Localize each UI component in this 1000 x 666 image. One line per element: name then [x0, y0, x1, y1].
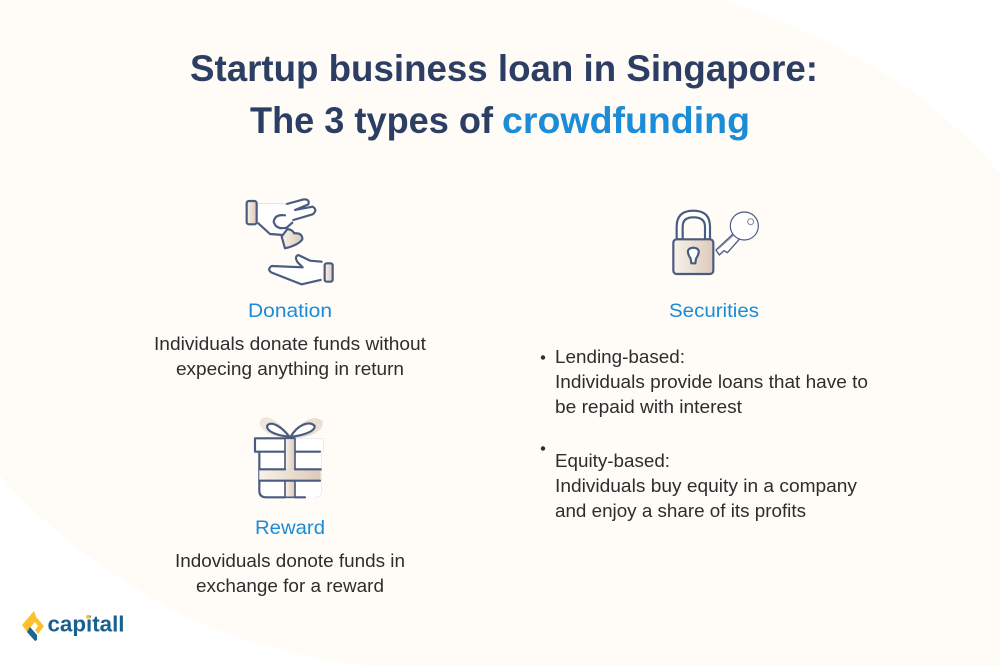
bullet: lending-based: be repaid with interest [555, 396, 742, 417]
icon: padlock and key [673, 211, 758, 274]
title: The 3 types of [250, 100, 494, 141]
icon: giving hands [247, 199, 333, 284]
panel: reward [175, 417, 405, 596]
title: Startup business loan in Singapore: [190, 48, 818, 89]
bullet: equity-based: and enjoy a share of its profits [555, 500, 806, 521]
panel: securities [541, 211, 868, 521]
panel: donation [154, 199, 426, 379]
bullet: equity-based: Equity-based: [555, 450, 670, 471]
icon: gift box [255, 417, 323, 497]
text: donation description: Individuals donate funds without [154, 333, 426, 354]
title: crowdfunding [502, 100, 750, 141]
bullet: lending-based: Individuals provide loans that have to [555, 371, 868, 392]
text: donation description: expecing anything in return [176, 358, 404, 379]
heading: reward: Reward [255, 517, 325, 539]
heading: donation: Donation [248, 300, 332, 322]
logo: capitall [22, 611, 124, 641]
icon: logo mark [22, 611, 44, 641]
text: reward description: Indoviduals donote funds in [175, 550, 405, 571]
bullet: equity-based: Individuals buy equity in a company [555, 475, 858, 496]
wordmark: capitall [48, 612, 124, 636]
text: donation description [154, 333, 426, 379]
bullet: lending-based [541, 346, 868, 417]
bullet: equity-based [541, 446, 858, 521]
text: reward description [175, 550, 405, 596]
bullet: lending-based: Lending-based: [555, 346, 685, 367]
heading: securities: Securities [669, 300, 759, 322]
text: reward description: exchange for a reward [196, 575, 384, 596]
title [190, 48, 818, 141]
